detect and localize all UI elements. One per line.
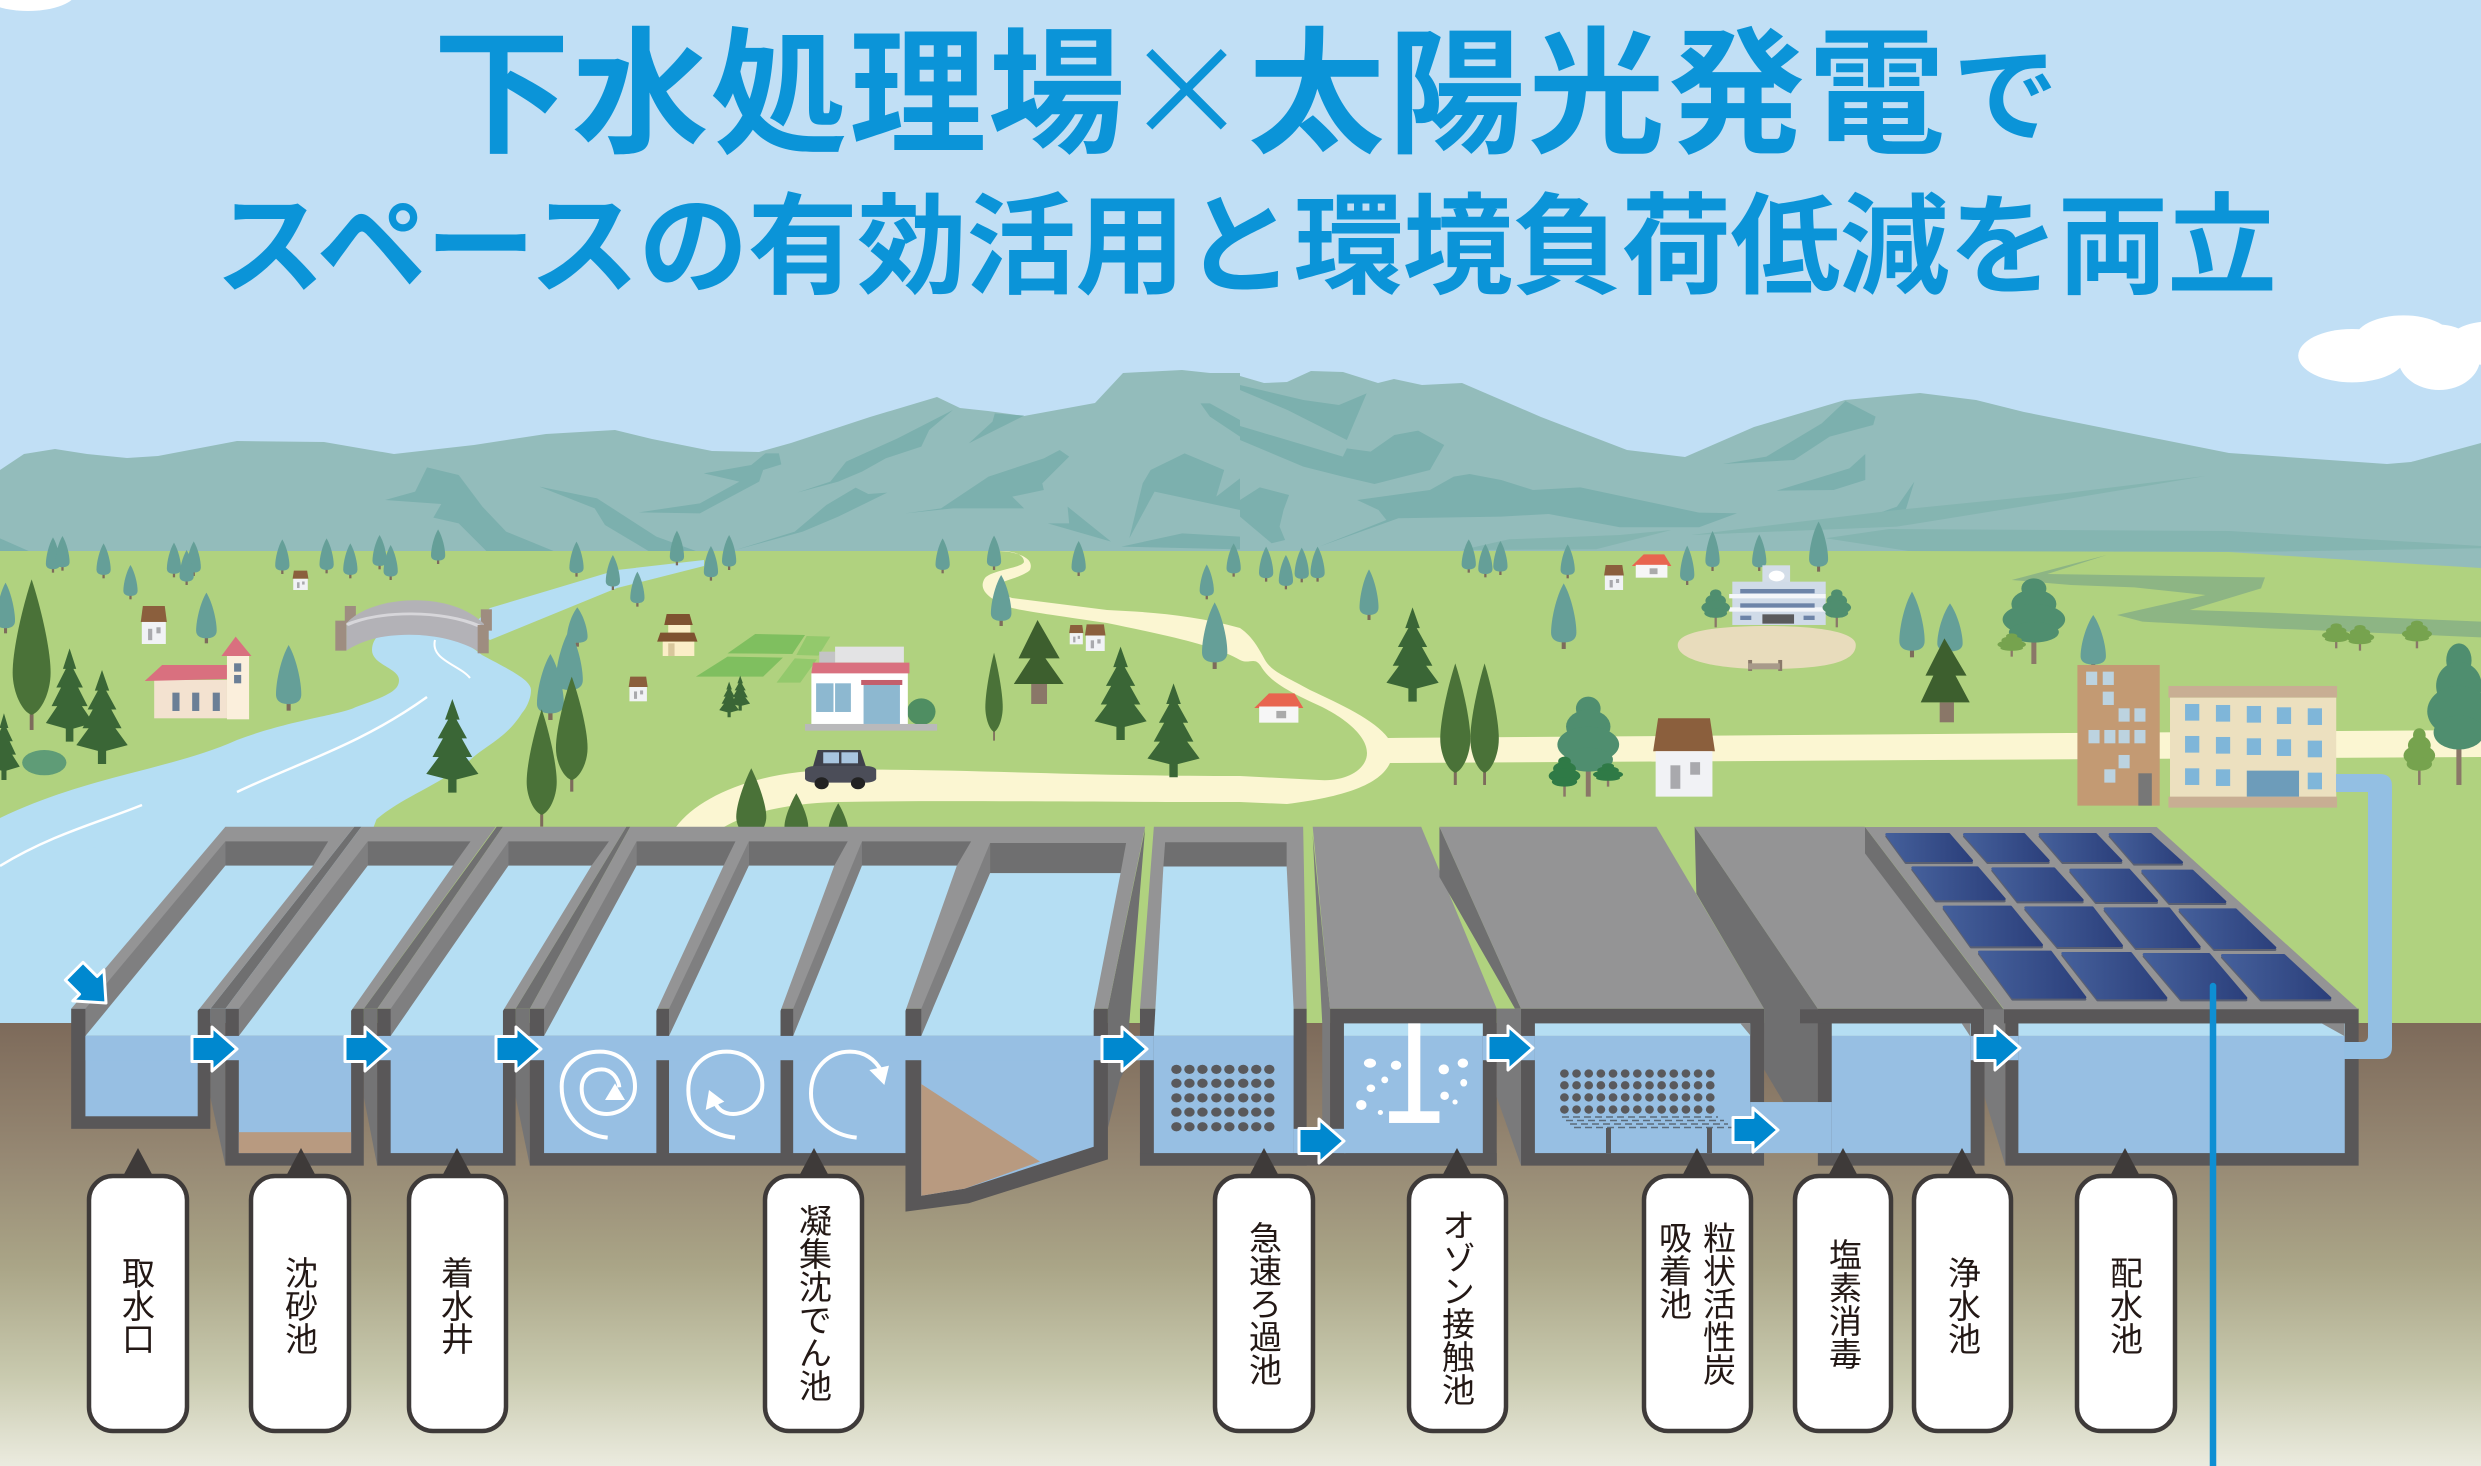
ozone roof side [1313, 835, 1330, 1136]
light water surfaces [1344, 1023, 2345, 1036]
river foreground [0, 810, 380, 1023]
filter surface [1154, 866, 1294, 1036]
car [805, 750, 876, 789]
front lintel [2004, 1009, 2358, 1023]
poplar trees [0, 529, 1241, 720]
cloud: right [2298, 315, 2481, 390]
brown building [2077, 665, 2160, 806]
round trees [1557, 578, 2481, 797]
bridge [335, 600, 492, 653]
swirl flows [562, 1052, 889, 1138]
white house [1653, 718, 1715, 797]
poplar trees [1259, 522, 2106, 670]
roof top [1865, 827, 2358, 1009]
label: rapid filter: 急速ろ過池 [1244, 1221, 1282, 1386]
chlorine gap side [1985, 1009, 2005, 1166]
label: ozone contact [1409, 1148, 1506, 1431]
label: chlorination: 塩素消毒 [1824, 1238, 1862, 1370]
label: grit chamber: 沈砂池 [280, 1256, 318, 1355]
field [0, 551, 2481, 1030]
river [0, 560, 704, 1030]
title: line 1: 太陽光発電 [1248, 19, 1945, 172]
triangular fir [1014, 620, 1064, 704]
label: coagulation sedimentation [765, 1148, 862, 1431]
title: line 2: スペースの有効活用と環境負荷低減を両立 [215, 186, 2277, 309]
lintel left [1800, 1009, 1984, 1023]
title: line 1: で [1953, 39, 2058, 156]
ozone diffuser [1356, 1023, 1468, 1123]
treatment tanks: filtration to distribution [1120, 827, 2359, 1166]
underground [0, 1023, 2481, 1466]
tank frames [71, 827, 1145, 1009]
mountains [0, 370, 2481, 600]
church [145, 637, 251, 719]
label: rapid filter [1215, 1148, 1313, 1431]
shop [805, 647, 937, 731]
trees and buildings: right half [1254, 522, 2481, 808]
dark green shrubs [1549, 757, 1623, 797]
treatment tanks: intake to sedimentation [71, 827, 1153, 1212]
swirl 1 [562, 1052, 635, 1138]
front walls [71, 1009, 1108, 1212]
river foreground highlight [0, 805, 142, 866]
label: receiving well: 着水井 [436, 1256, 474, 1355]
filter basin frame [1140, 827, 1307, 1009]
ozone bubbles [1356, 1059, 1468, 1115]
cypress trees [13, 579, 1003, 847]
label: granular activated carbon [1644, 1148, 1751, 1431]
sand deposit [239, 1132, 351, 1153]
farm field [696, 634, 830, 683]
roof dark side [1865, 827, 2004, 1010]
triangular fir [1921, 638, 1970, 722]
cloud: top left [0, 0, 76, 11]
flow arrows [59, 956, 2020, 1163]
carbon roof [1439, 827, 1764, 1009]
river upstream [470, 560, 704, 640]
water bodies [1120, 1036, 2345, 1153]
label: grit chamber [251, 1148, 349, 1431]
distribution pipe [2336, 774, 2392, 1059]
inner corners [1962, 1023, 1970, 1036]
school building [1729, 565, 1826, 625]
gate [1748, 660, 1782, 671]
label: clear water [1914, 1148, 2011, 1431]
solar roof and panels [1800, 827, 2358, 1043]
small houses [141, 571, 1106, 701]
back walls [225, 841, 1126, 873]
inner side faces [85, 841, 990, 1036]
label: distribution reservoir [2077, 1148, 2175, 1431]
road [676, 551, 2481, 827]
small houses [1254, 554, 1671, 723]
power line from solar panels [2210, 986, 2216, 1466]
label: intake: 取水口 [118, 1256, 155, 1355]
filter media dots [1171, 1065, 1275, 1131]
label: coagulation sedimentation: 凝集沈でん池 [794, 1204, 832, 1402]
cypress pair [1440, 663, 1499, 785]
gap columns [210, 1009, 530, 1166]
mountain shading: right range [1240, 385, 2481, 552]
water bodies [85, 1036, 1153, 1196]
title: line 1 [433, 0, 2058, 172]
carbon roof side [1439, 827, 1521, 1019]
mountain shading: left range [0, 403, 1240, 552]
gap wall sides [1497, 1009, 1521, 1166]
wall gap strips [210, 827, 1145, 1128]
ozone roof [1313, 827, 1497, 1009]
river highlights [237, 640, 470, 792]
filter back wall [1163, 842, 1287, 866]
dark fir trees [0, 647, 1200, 793]
centre column [1984, 1009, 2004, 1043]
label: granular activated carbon: 粒状活性炭 [1698, 1221, 1736, 1386]
solar panels [1887, 834, 2330, 1000]
trees and buildings: left half [0, 529, 1241, 847]
label: clear water: 浄水池 [1944, 1256, 1981, 1355]
dark fir [1386, 607, 1439, 702]
chlorine roof [1695, 827, 1985, 1009]
inner corner right [2322, 1023, 2344, 1036]
distant dark-green river [2012, 555, 2481, 637]
bright green bushes [1997, 621, 2435, 785]
title: line 1: 下水処理場 [433, 19, 1125, 172]
water surfaces [85, 866, 1121, 1036]
label: ozone contact: オゾン接触池 [1438, 1208, 1475, 1406]
front walls [1140, 1009, 2359, 1166]
activated carbon dots [1560, 1069, 1715, 1114]
label: chlorination [1795, 1148, 1891, 1431]
cream building [2168, 686, 2337, 808]
carbon tank inner corner [1740, 1023, 1750, 1035]
carbon support rack [1562, 1117, 1732, 1153]
label: distribution reservoir: 配水池 [2106, 1256, 2143, 1355]
swirl 3 [811, 1052, 889, 1138]
schoolyard [1678, 626, 1856, 669]
swirl 2 [688, 1052, 762, 1138]
label: intake [89, 1148, 187, 1431]
stacked cream house [657, 614, 697, 656]
bush [22, 750, 66, 775]
sludge deposit [921, 1084, 1040, 1196]
label: receiving well [409, 1148, 506, 1431]
label: granular activated carbon: 吸着池 [1654, 1221, 1692, 1320]
chlorine shaft [1695, 827, 1818, 1103]
